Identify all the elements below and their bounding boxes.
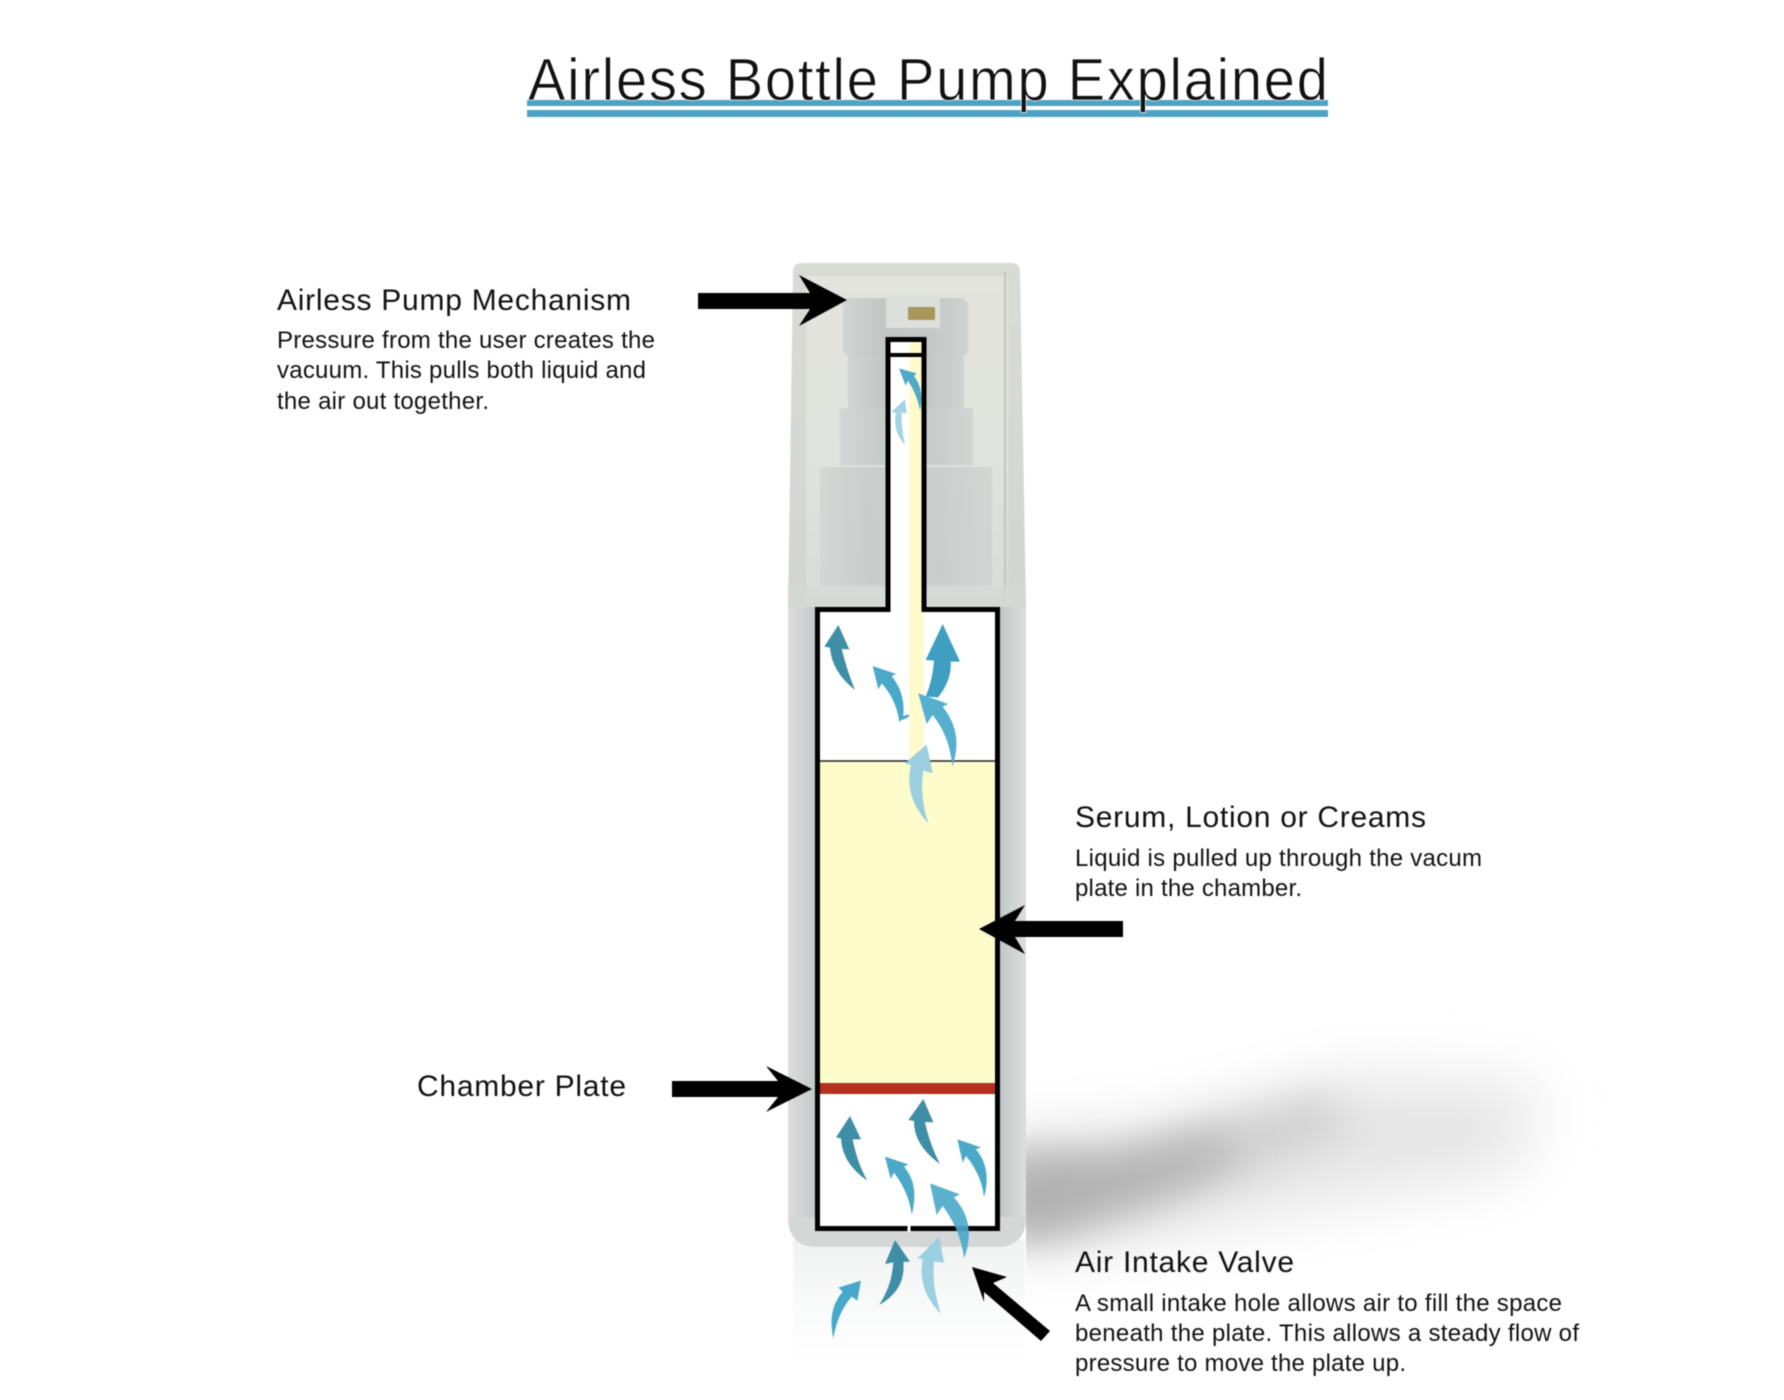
text: serum, lotion or creams: plate in the chamber.: [1075, 875, 1302, 902]
chamber: neck and air space: [818, 340, 998, 1228]
text: airless pump mechanism: Pressure from the user creates the: [277, 327, 655, 354]
pump mechanism: [788, 296, 1026, 607]
text: airless pump mechanism: the air out together.: [277, 388, 489, 415]
text: airless pump mechanism: vacuum. This pulls both liquid and: [277, 357, 646, 384]
text: air intake valve: beneath the plate. This allows a steady flow of: [1075, 1320, 1579, 1347]
text: serum, lotion or creams: Serum, Lotion or Creams: [1075, 801, 1426, 834]
airless bottle: [788, 263, 1026, 1247]
text: air intake valve: A small intake hole allows air to fill the space: [1075, 1290, 1562, 1317]
chamber plate: [818, 1083, 998, 1094]
text: air intake valve: pressure to move the plate up.: [1075, 1350, 1406, 1377]
text: serum, lotion or creams: Liquid is pulled up through the vacum: [1075, 845, 1482, 872]
text: airless pump mechanism: [277, 284, 655, 415]
text: airless pump mechanism: Airless Pump Mechanism: [277, 284, 631, 317]
bottle reflection: [793, 1240, 1025, 1362]
serum liquid: [818, 761, 998, 1084]
text: serum, lotion or creams: [1075, 801, 1482, 902]
bottle cast shadow: [1000, 1075, 1540, 1250]
neck air flow arrows: [892, 368, 921, 445]
title: Airless Bottle Pump Explained: [528, 48, 1328, 113]
bottle cap: [788, 263, 1026, 607]
upper air flow arrows: [824, 624, 960, 823]
chamber outline: [818, 340, 998, 1228]
text: air intake valve: Air Intake Valve: [1075, 1246, 1294, 1279]
text: chamber plate: Chamber Plate: [417, 1070, 626, 1103]
arrow: chamber plate: [672, 1066, 812, 1112]
arrow: pump mechanism: [698, 275, 847, 326]
arrow: serum: [979, 905, 1123, 954]
text: air intake valve: [1075, 1246, 1579, 1377]
arrow: air intake valve: [972, 1267, 1050, 1341]
bottle body: [788, 600, 1026, 1247]
lower air flow arrows: [832, 1099, 987, 1338]
serum in the dip tube: [909, 341, 924, 763]
air intake hole: [908, 1225, 910, 1232]
